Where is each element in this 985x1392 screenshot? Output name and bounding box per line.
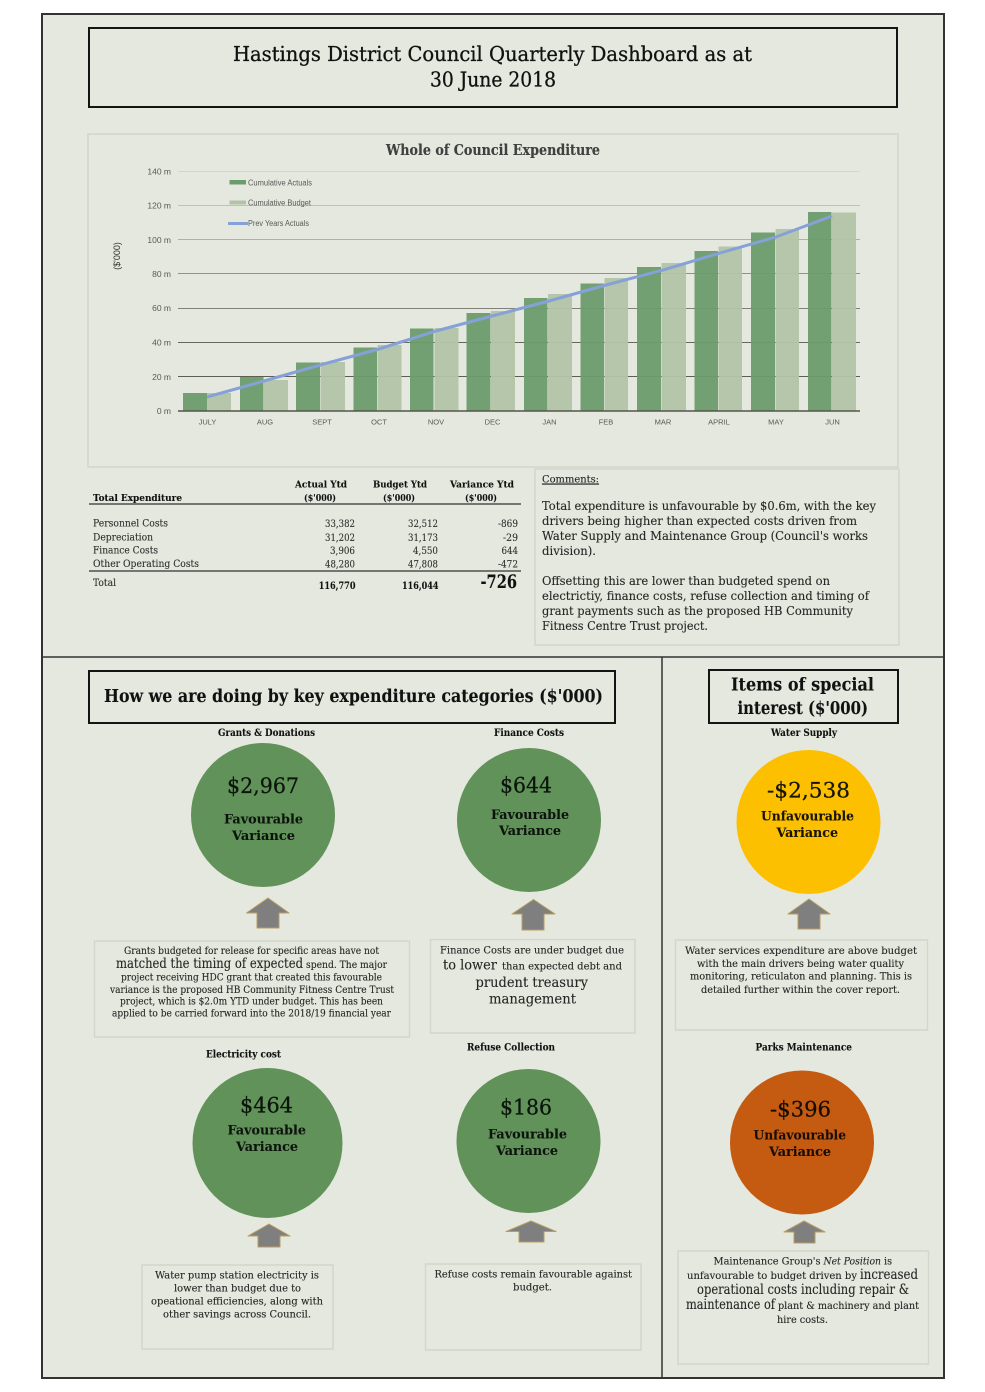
category: grants and donations: Grants & Donations	[218, 728, 315, 739]
circle: refuse variance	[456, 1069, 600, 1213]
circle: refuse variance: Variance	[495, 1144, 558, 1159]
legend	[228, 178, 312, 228]
text box: grants explanation: Grants budgeted for release for specific areas have not	[124, 945, 380, 957]
text box: finance explanation: Finance Costs are under budget due	[440, 944, 624, 956]
title: 30 June 2018	[430, 68, 556, 92]
table rows: Depreciation	[93, 532, 154, 544]
table rows: -472	[498, 560, 518, 570]
heading: items of special interest: interest ($'000)	[738, 699, 868, 719]
circle: refuse variance: $186	[500, 1096, 552, 1120]
text box: grants explanation: matched the timing of expected	[116, 956, 303, 972]
month labels: FEB	[599, 418, 613, 426]
circle: refuse variance: Favourable	[488, 1128, 567, 1142]
category: electricity cost	[142, 1050, 342, 1349]
text box: parks maintenance explanation: is	[884, 1255, 892, 1267]
cumulative actual and budget bars	[183, 212, 856, 411]
category: refuse collection	[426, 1042, 641, 1350]
circle: electricity variance	[192, 1068, 342, 1218]
text box: parks maintenance explanation: maintenance of	[686, 1297, 776, 1313]
table total row: 116,044	[402, 581, 439, 592]
text box: water supply explanation: Water services expenditure are above budget	[685, 945, 918, 957]
panel: comments	[535, 469, 899, 645]
text box: parks maintenance explanation: Maintenance Group's	[714, 1255, 820, 1267]
text box: parks maintenance explanation: operational costs including repair &	[697, 1282, 909, 1298]
table rows: 32,512	[408, 519, 438, 530]
month labels: APRIL	[708, 418, 730, 426]
circle: water supply variance: Unfavourable	[761, 810, 854, 825]
title	[89, 28, 897, 107]
text box: finance explanation: than expected debt and	[502, 960, 622, 972]
panel: comments: Fitness Centre Trust project.	[542, 619, 708, 633]
y axis labels	[147, 166, 171, 416]
table header: Budget Ytd	[373, 480, 427, 490]
text box: electricity explanation	[142, 1265, 333, 1349]
text box: finance explanation: to lower	[443, 958, 498, 974]
table rows: Finance Costs	[93, 546, 158, 556]
text box: grants explanation: project receiving HDC grant that created this favourable	[121, 972, 382, 984]
y axis labels: 20 m	[152, 372, 171, 382]
heading: key expenditure categories: How we are doing by key expenditure categories ($'000)	[104, 687, 603, 707]
table total row: 116,770	[319, 581, 356, 592]
text box: water supply explanation	[676, 940, 928, 1030]
table header: Total Expenditure	[93, 493, 182, 504]
panel: comments: electrictiy, finance costs, refuse collection and timing of	[542, 589, 870, 603]
y axis labels: 0 m	[157, 406, 171, 416]
panel: comments: drivers being higher than expected costs driven from	[542, 514, 858, 528]
circle: water supply variance	[736, 750, 880, 894]
icon: up arrow	[512, 900, 555, 930]
table total row	[93, 571, 517, 593]
circle: finance variance: Favourable	[491, 808, 569, 823]
y axis title: ($'000)	[112, 242, 122, 270]
month labels: SEPT	[312, 418, 332, 426]
panel: comments: grant payments such as the proposed HB Community	[542, 604, 853, 618]
text box: finance explanation: management	[489, 992, 577, 1008]
total expenditure table	[89, 480, 521, 593]
month labels: OCT	[371, 418, 387, 426]
icon: up arrow	[506, 1221, 556, 1242]
icon: up arrow	[248, 1224, 290, 1247]
heading: items of special interest	[709, 670, 898, 723]
category: finance costs	[430, 728, 635, 1033]
circle: electricity variance: Favourable	[228, 1124, 306, 1139]
circle: water supply variance: Variance	[776, 826, 838, 841]
table header: ($'000)	[465, 493, 497, 504]
item: water supply	[676, 728, 928, 1030]
circle: grants variance: Favourable	[224, 812, 303, 828]
item: water supply: Water Supply	[770, 728, 838, 739]
circle: grants variance: Variance	[231, 829, 295, 844]
text box: grants explanation	[94, 941, 410, 1037]
panel: comments: Offsetting this are lower than budgeted spend on	[542, 574, 830, 588]
circle: parks maintenance variance: Unfavourable	[754, 1128, 846, 1143]
text box: electricity explanation: opeational efficiencies, along with	[151, 1296, 323, 1308]
legend: Prev Years Actuals	[248, 219, 309, 228]
circle: parks maintenance variance	[730, 1070, 874, 1214]
legend: Cumulative Actuals	[248, 178, 312, 188]
circle: finance variance	[457, 748, 601, 892]
table rows: Other Operating Costs	[93, 559, 199, 570]
y axis labels: 120 m	[147, 200, 171, 210]
heading: key expenditure categories	[89, 671, 615, 723]
month labels: DEC	[485, 418, 501, 426]
icon: up arrow	[246, 898, 289, 928]
y axis labels: 40 m	[152, 338, 171, 348]
month labels: JULY	[199, 418, 216, 426]
month labels	[199, 418, 840, 426]
table rows: -29	[503, 533, 518, 544]
month labels: AUG	[257, 418, 273, 426]
circle: finance variance: Variance	[498, 824, 561, 839]
title: Hastings District Council Quarterly Dashboard as at	[233, 42, 753, 66]
month labels: JUN	[825, 418, 840, 426]
table header	[93, 480, 514, 504]
item: parks maintenance	[678, 1043, 928, 1364]
y axis labels: 80 m	[152, 269, 171, 279]
table header: ($'000)	[304, 493, 336, 504]
y axis labels: 140 m	[147, 166, 171, 176]
month labels: MAR	[655, 418, 672, 426]
panel: comments: Water Supply and Maintenance Group (Council's works	[542, 529, 868, 543]
table header: Variance Ytd	[449, 480, 514, 490]
category: grants and donations	[94, 728, 410, 1037]
heading: items of special interest: Items of special	[731, 676, 874, 696]
text box: finance explanation	[430, 940, 635, 1033]
table rows: 33,382	[325, 519, 355, 530]
text box: electricity explanation: Water pump station electricity is	[155, 1269, 319, 1281]
text box: electricity explanation: other savings across Council.	[163, 1308, 311, 1320]
table rows	[93, 518, 518, 570]
table header: ($'000)	[383, 493, 415, 504]
table rows: 31,173	[408, 533, 438, 544]
category: finance costs: Finance Costs	[494, 728, 564, 739]
text box: grants explanation: variance is the proposed HB Community Fitness Centre Trust	[109, 984, 395, 996]
text box: parks maintenance explanation: Net Position	[823, 1255, 881, 1267]
panel: comments: division).	[542, 544, 596, 558]
text box: electricity explanation: lower than budget due to	[174, 1282, 301, 1294]
text box: refuse explanation: Refuse costs remain favourable against	[434, 1268, 633, 1280]
month labels: JAN	[542, 418, 557, 426]
y axis labels: 60 m	[152, 303, 171, 313]
table rows: 31,202	[325, 533, 355, 544]
circle: parks maintenance variance: Variance	[768, 1145, 831, 1160]
text box: grants explanation: applied to be carried forward into the 2018/19 financial year	[112, 1008, 392, 1020]
text box: water supply explanation: detailed further within the cover report.	[701, 984, 900, 996]
category: refuse collection: Refuse Collection	[467, 1042, 556, 1054]
text box: refuse explanation	[426, 1264, 641, 1350]
chart title: Whole of Council Expenditure	[385, 142, 600, 159]
circle: grants variance	[191, 743, 335, 887]
text box: parks maintenance explanation: increased	[860, 1267, 918, 1283]
circle: electricity variance: $464	[240, 1094, 293, 1118]
text box: water supply explanation: with the main drivers being water quality	[697, 958, 904, 970]
month labels: MAY	[768, 418, 784, 426]
icon: up arrow	[784, 1221, 825, 1243]
table total row: Total	[93, 578, 116, 589]
panel: comments: Comments:	[542, 474, 599, 486]
legend: Cumulative Budget	[248, 198, 312, 208]
circle: grants variance: $2,967	[227, 774, 299, 798]
table rows: 48,280	[325, 560, 355, 570]
previous years actuals line	[207, 216, 832, 397]
category: electricity cost: Electricity cost	[206, 1050, 281, 1060]
text box: grants explanation: spend. The major	[306, 959, 388, 971]
text box: parks maintenance explanation: hire costs.	[777, 1314, 828, 1326]
table rows: -869	[498, 519, 518, 530]
text box: parks maintenance explanation: plant & machinery and plant	[778, 1300, 920, 1312]
text box: finance explanation: prudent treasury	[476, 975, 588, 991]
table rows: 644	[502, 546, 518, 557]
month labels: NOV	[428, 418, 444, 426]
y axis labels: 100 m	[147, 235, 171, 245]
text box: water supply explanation: monitoring, reticulaton and planning. This is	[690, 970, 912, 982]
icon: up arrow	[788, 899, 830, 929]
circle: finance variance: $644	[500, 774, 552, 798]
circle: water supply variance: -$2,538	[767, 779, 850, 803]
text box: refuse explanation: budget.	[513, 1282, 552, 1294]
text box: parks maintenance explanation	[678, 1251, 928, 1364]
table rows: 47,808	[408, 560, 438, 570]
panel: whole of council expenditure chart	[88, 134, 898, 467]
panel: comments: Total expenditure is unfavourable by $0.6m, with the key	[542, 499, 876, 513]
item: parks maintenance: Parks Maintenance	[756, 1043, 852, 1054]
table rows: Personnel Costs	[93, 518, 168, 530]
circle: electricity variance: Variance	[235, 1140, 298, 1155]
circle: parks maintenance variance: -$396	[770, 1098, 831, 1122]
table rows: 4,550	[413, 546, 438, 557]
table header: Actual Ytd	[294, 480, 347, 490]
table rows: 3,906	[330, 546, 355, 557]
table total row: -726	[480, 571, 517, 593]
text box: parks maintenance explanation: unfavourable to budget driven by	[687, 1270, 857, 1282]
text box: grants explanation: project, which is $2.0m YTD under budget. This has been	[120, 996, 383, 1008]
